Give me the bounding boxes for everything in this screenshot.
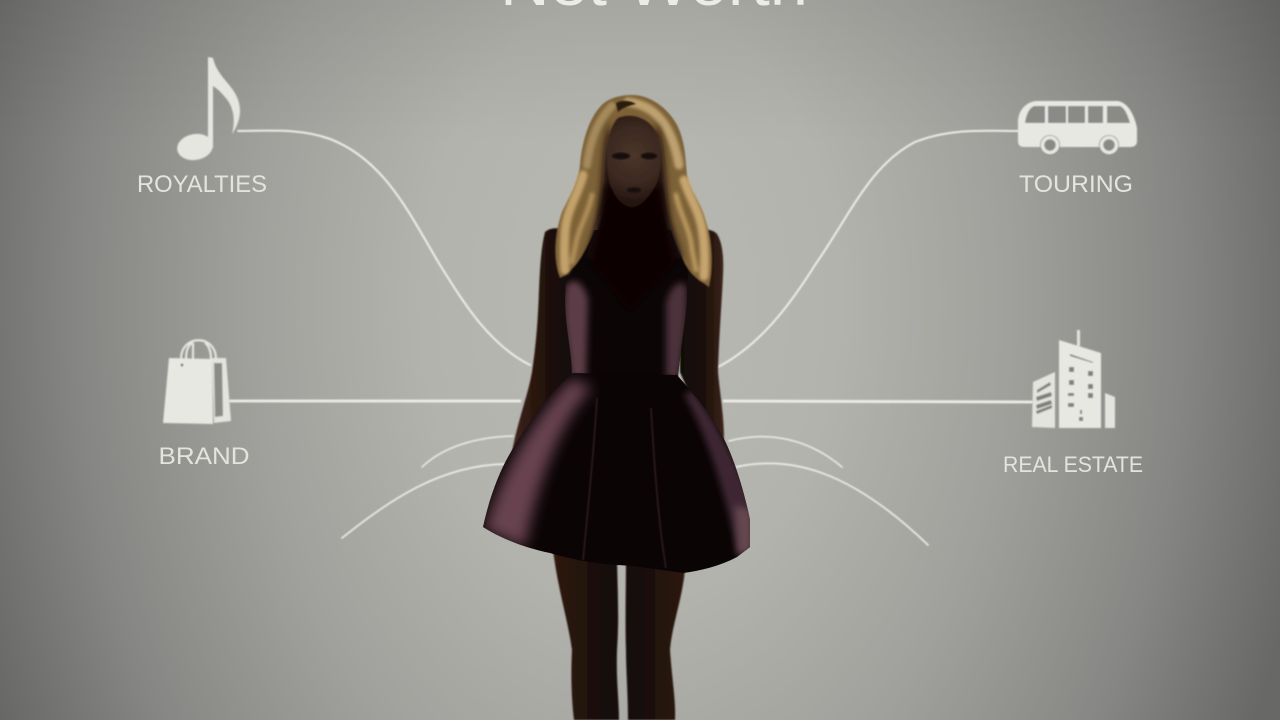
hair [555, 95, 712, 287]
skirt highlight left [484, 378, 592, 548]
connector: lower right inner [729, 437, 842, 467]
skirt pleats [583, 398, 666, 568]
label: real estate: REAL ESTATE [1003, 452, 1143, 477]
label: brand: BRAND [158, 443, 250, 470]
bodice highlight left [564, 281, 588, 378]
arms [512, 228, 724, 452]
skirt fold lower right [735, 505, 752, 556]
icon: city buildings [1032, 330, 1115, 428]
icon: tour bus [1018, 101, 1137, 155]
figure: silhouette of woman in dress [470, 95, 760, 720]
hair inner shadow [586, 122, 682, 262]
connector: brand [230, 400, 520, 402]
face [607, 116, 661, 207]
skirt highlight right [684, 390, 755, 555]
hair parting [616, 101, 636, 112]
skirt [483, 373, 750, 573]
icon: shopping bag [163, 340, 231, 424]
facial features [612, 153, 657, 192]
legs [553, 550, 685, 720]
neck and chest shadow [590, 185, 676, 312]
connector lines [230, 131, 1032, 545]
hair highlights [564, 102, 705, 276]
label: touring: TOURING [1019, 171, 1133, 198]
icon: music note [175, 57, 240, 163]
label: royalties: ROYALTIES [137, 171, 267, 198]
connector: real estate [724, 401, 1032, 402]
bodice [565, 230, 688, 376]
connector: royalties [238, 131, 530, 365]
connector: lower left outer [342, 464, 506, 538]
hair mass [555, 95, 712, 287]
connector: lower right outer [736, 463, 928, 545]
bodice highlight right [666, 283, 687, 378]
connector: touring [718, 131, 1018, 367]
connector: lower left inner [422, 436, 513, 467]
